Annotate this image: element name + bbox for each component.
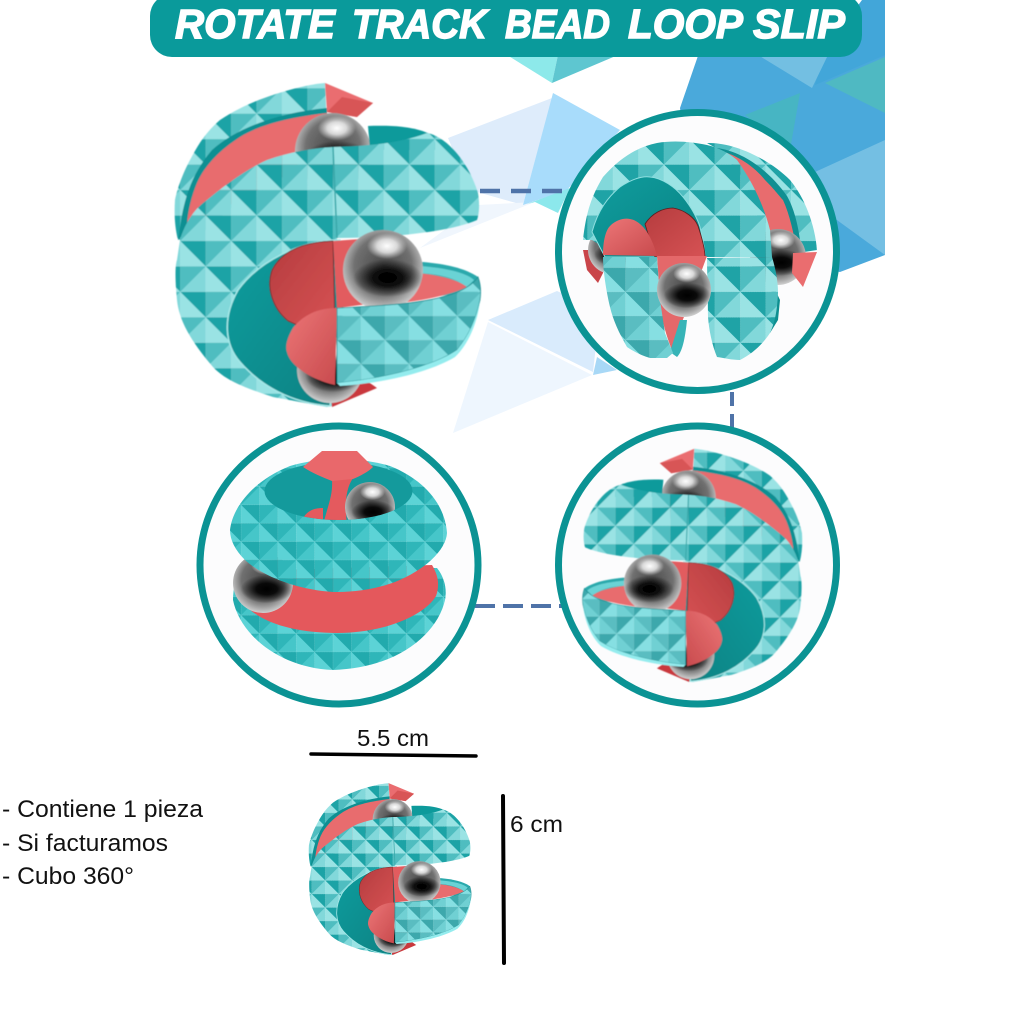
title: ROTATE — [175, 1, 337, 47]
red bulge — [286, 308, 337, 385]
upper ring — [230, 459, 447, 592]
contents of ring hole — [304, 479, 395, 520]
front dome — [583, 142, 772, 257]
red base — [304, 508, 323, 520]
dark strip of right lobe — [770, 283, 780, 333]
lower left lobe — [603, 257, 673, 358]
title banner — [150, 0, 862, 57]
lower ring rim — [400, 262, 478, 300]
mirrored product view — [583, 449, 802, 682]
red floor — [400, 273, 467, 303]
lower ring — [233, 568, 446, 670]
title: LOOP — [628, 1, 744, 47]
dark strip on ring — [717, 148, 801, 252]
right cone — [792, 252, 817, 287]
right steel bead — [750, 229, 806, 285]
bottom red cone — [330, 381, 377, 407]
width label: 5.5 cm — [357, 725, 429, 751]
bottom steel bead — [297, 337, 363, 403]
circle panel: top right — [558, 112, 836, 390]
lower ring highlight — [337, 300, 480, 386]
dark red hemisphere — [645, 208, 705, 257]
dashed connector: bottom — [475, 604, 562, 608]
feature list: - Cubo 360° — [2, 863, 134, 890]
title: BEAD — [505, 1, 610, 47]
left steel bead — [233, 553, 293, 613]
lower ring — [337, 277, 481, 383]
feature list: - Si facturamos — [2, 830, 168, 857]
red strip under centre — [657, 256, 707, 350]
red groove — [187, 113, 335, 224]
red top cap — [303, 451, 373, 481]
circle panel: bottom left — [200, 426, 478, 704]
seam on upper band — [333, 147, 337, 238]
title — [175, 1, 846, 47]
inner dark teal crescent — [227, 240, 345, 406]
ring hole — [264, 462, 412, 520]
centre steel bead — [657, 263, 711, 317]
background: triangle pattern — [420, 0, 885, 433]
middle steel bead — [343, 230, 423, 310]
left cone — [583, 250, 605, 283]
light red bulge — [603, 219, 657, 256]
left steel bead — [588, 226, 636, 274]
dome inner dark teal — [592, 177, 705, 257]
red hemisphere, right half — [333, 238, 400, 308]
height label: 6 cm — [510, 811, 563, 837]
dashed connector: vertical — [730, 392, 734, 428]
size reference product — [309, 783, 471, 955]
circle panel: bottom right — [558, 426, 836, 704]
title: SLIP — [753, 1, 846, 47]
inner rim of upper ring — [368, 126, 440, 150]
top red cone — [325, 83, 373, 117]
red hemisphere, left half — [270, 241, 335, 325]
red floor — [247, 565, 438, 633]
right red band — [717, 150, 797, 252]
feature list — [2, 796, 204, 890]
back spiral ring — [175, 83, 327, 240]
right-back ring — [707, 143, 817, 257]
main body shell — [176, 133, 479, 407]
lower right lobe — [707, 257, 778, 360]
top steel bead — [295, 113, 371, 189]
teal rim of left lobe — [670, 320, 687, 357]
dark strip under ring — [178, 108, 327, 240]
title: TRACK — [352, 1, 490, 47]
feature list: - Contiene 1 pieza — [2, 796, 204, 823]
main product: spiral ball — [175, 83, 481, 407]
top steel bead — [345, 482, 395, 520]
dashed connector: top — [480, 189, 567, 193]
